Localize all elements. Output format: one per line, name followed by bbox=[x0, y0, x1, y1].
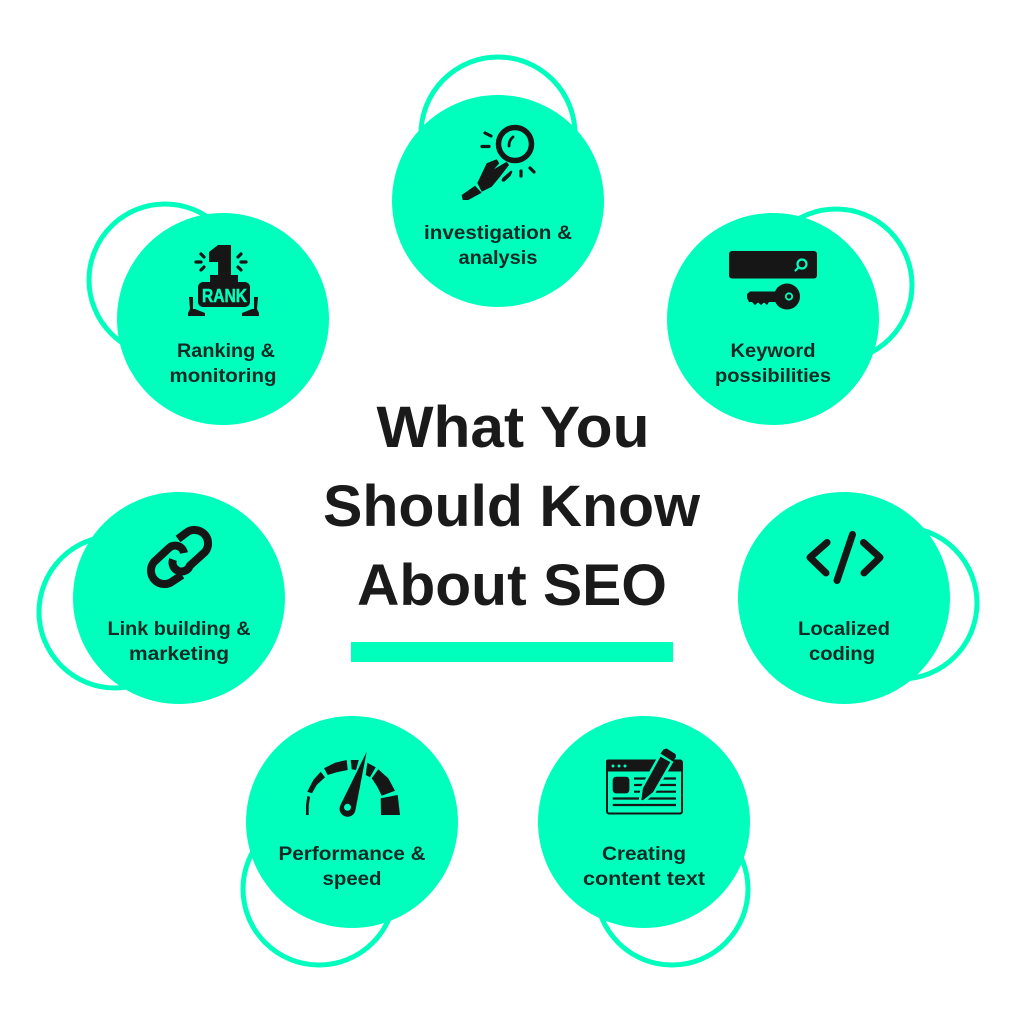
icon: speedometer gauge bbox=[306, 752, 400, 817]
panel: keyword possibilities bbox=[667, 209, 912, 425]
title underline bar bbox=[351, 642, 673, 662]
icon: search bar and key bbox=[729, 251, 817, 310]
panel: investigation and analysis bbox=[392, 57, 604, 307]
label: ranking and monitoring: Ranking & bbox=[177, 341, 275, 362]
label: creating content text: Creating bbox=[602, 844, 686, 865]
title: Should Know bbox=[323, 474, 701, 539]
panel: localized coding bbox=[738, 492, 977, 704]
title bbox=[323, 395, 701, 618]
panel: link building and marketing: marketing bbox=[129, 644, 229, 665]
panel: ranking and monitoring: monitoring bbox=[170, 366, 276, 387]
label: keyword possibilities: Keyword bbox=[730, 341, 816, 362]
panel: investigation and analysis: analysis bbox=[458, 248, 538, 269]
icon: number one rank podium bbox=[188, 245, 259, 316]
label: link building and marketing: Link building & bbox=[108, 619, 251, 640]
title: What You bbox=[376, 395, 650, 460]
icon: number one rank podium: RANK bbox=[202, 286, 247, 306]
icon: chain link bbox=[151, 530, 208, 584]
icon: code brackets bbox=[810, 534, 880, 580]
panel: ranking and monitoring bbox=[89, 204, 329, 425]
icon: hand holding magnifier bbox=[462, 128, 534, 200]
panel: creating content text: content text bbox=[583, 869, 706, 890]
panel: creating content text bbox=[538, 716, 750, 965]
panel: link building and marketing bbox=[39, 492, 285, 704]
label: investigation and analysis: investigation & bbox=[424, 223, 572, 244]
panel: performance and speed bbox=[243, 716, 458, 965]
icon: browser window with pen bbox=[606, 748, 682, 814]
label: localized coding: Localized bbox=[798, 619, 890, 640]
panel: localized coding: coding bbox=[809, 644, 875, 665]
panel: performance and speed: speed bbox=[322, 869, 382, 890]
label: performance and speed: Performance & bbox=[278, 844, 426, 865]
title: About SEO bbox=[357, 553, 667, 618]
panel: keyword possibilities: possibilities bbox=[715, 366, 831, 387]
